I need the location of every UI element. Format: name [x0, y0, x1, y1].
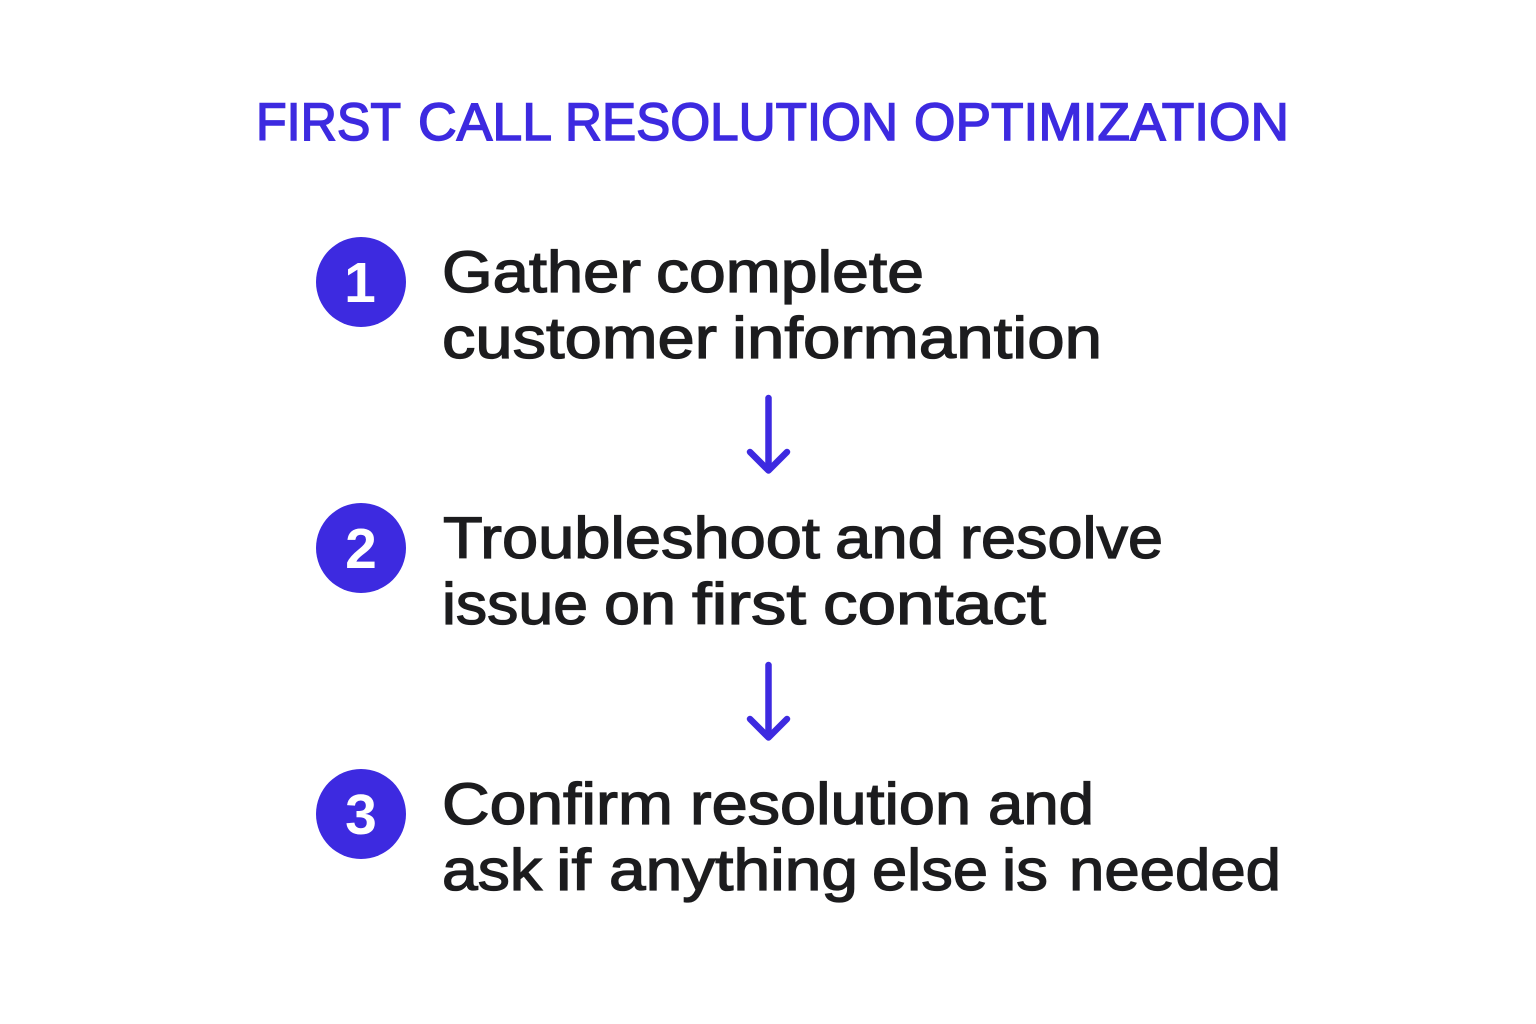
step 2 text: issue [442, 572, 588, 637]
step 3 text: anything [609, 838, 858, 903]
step 2 text: on [604, 572, 676, 637]
step 2 text [442, 506, 1163, 637]
arrow: step 1 to step 2 [750, 398, 787, 470]
step 1 text [442, 240, 1102, 371]
title: FIRST [256, 93, 401, 152]
step 2 text: Troubleshoot [443, 506, 820, 571]
step 3 text: is [1002, 838, 1048, 903]
title: RESOLUTION [565, 93, 898, 152]
title: CALL [418, 93, 552, 152]
step 1 [316, 237, 1102, 371]
icon: number badge 2 [316, 503, 406, 593]
step 2 [316, 503, 1163, 637]
step 3 text: Confirm [442, 772, 673, 837]
step 1 text: complete [656, 240, 924, 305]
title: OPTIMIZATION [914, 93, 1289, 152]
title [256, 93, 1289, 152]
step 3 text: and [988, 772, 1094, 837]
icon: number badge 3 [316, 769, 406, 859]
icon: number badge 1 [316, 237, 406, 327]
step 2 text: resolve [960, 506, 1163, 571]
step 3 text: resolution [690, 772, 971, 837]
step 3 text: if [556, 838, 592, 903]
step 2 text: contact [823, 572, 1046, 637]
icon: number badge 2: 2 [345, 517, 377, 581]
step 3 text: ask [442, 838, 543, 903]
step 3 text: else [872, 838, 988, 903]
icon: number badge 3: 3 [345, 783, 377, 847]
step 1 text: customer [442, 306, 717, 371]
arrow: step 2 to step 3 [750, 665, 787, 738]
step 2 text: first [692, 572, 806, 637]
step 3 text [442, 772, 1281, 903]
step 2 text: and [835, 506, 944, 571]
icon: number badge 1: 1 [344, 251, 376, 315]
step 1 text: informantion [732, 306, 1102, 371]
step 1 text: Gather [442, 240, 641, 305]
step 3 [316, 769, 1281, 903]
step 3 text: needed [1069, 838, 1281, 903]
